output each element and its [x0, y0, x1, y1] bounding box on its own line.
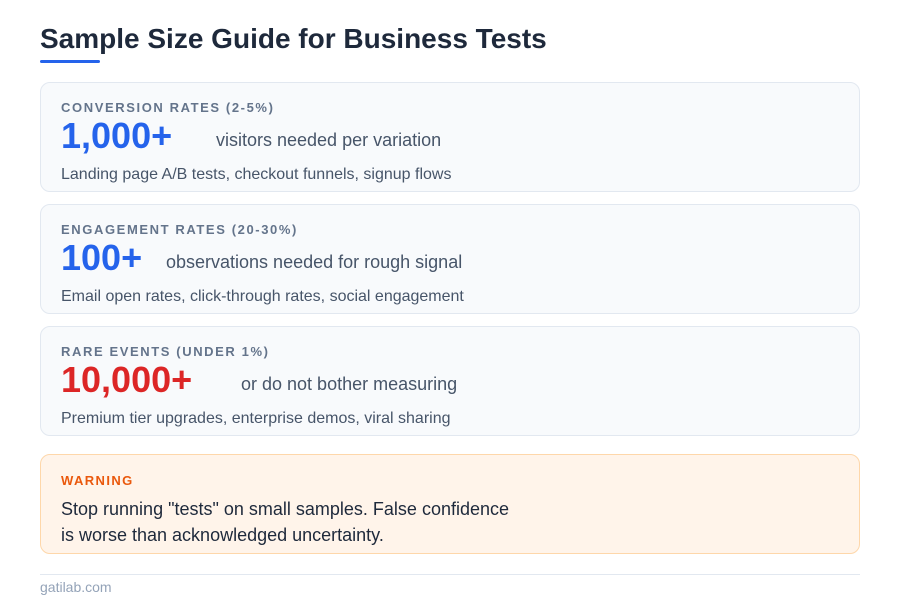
- warning text: Stop running "tests" on small samples. False confidence: [61, 499, 509, 519]
- description: visitors needed per variation: [216, 130, 441, 150]
- title underline: [40, 60, 100, 63]
- footer: gatilab.com: [40, 579, 112, 595]
- number: 1,000+: [61, 115, 172, 156]
- warning text: [61, 499, 509, 545]
- label: ENGAGEMENT RATES (20-30%): [61, 222, 298, 237]
- panel: conversion rates: [40, 82, 860, 192]
- examples: Email open rates, click-through rates, social engagement: [61, 288, 464, 305]
- examples: Landing page A/B tests, checkout funnels, signup flows: [61, 166, 451, 183]
- panel: rare events: [40, 326, 860, 436]
- title: Sample Size Guide for Business Tests: [40, 23, 547, 54]
- label: RARE EVENTS (UNDER 1%): [61, 344, 270, 359]
- number: 100+: [61, 237, 142, 278]
- warning label: WARNING: [61, 473, 134, 488]
- number: 10,000+: [61, 359, 192, 400]
- panel: engagement rates: [40, 204, 860, 314]
- label: CONVERSION RATES (2-5%): [61, 100, 275, 115]
- description: observations needed for rough signal: [166, 252, 462, 272]
- examples: Premium tier upgrades, enterprise demos, viral sharing: [61, 410, 450, 427]
- description: or do not bother measuring: [241, 374, 457, 394]
- warning text: is worse than acknowledged uncertainty.: [61, 525, 384, 545]
- callout: warning: [40, 454, 860, 554]
